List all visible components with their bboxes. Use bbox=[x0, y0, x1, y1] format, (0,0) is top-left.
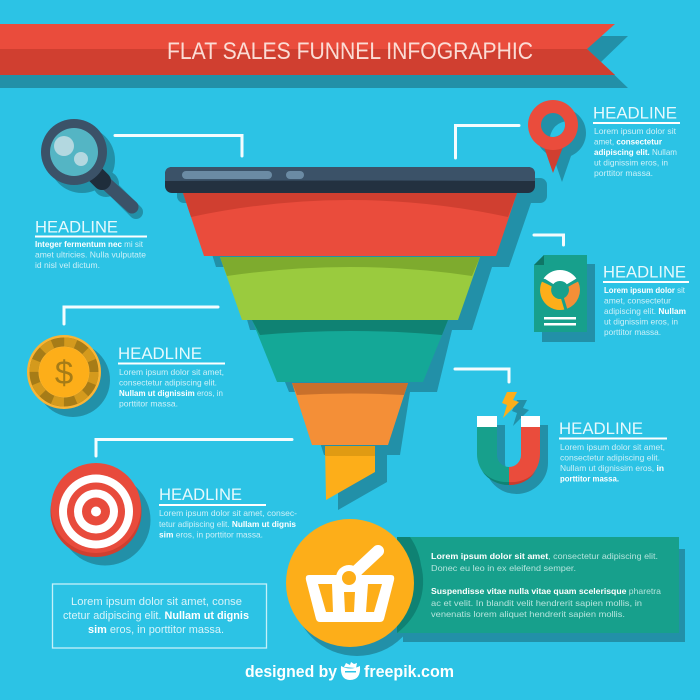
callout box: ctetur adipiscing elit. Nullam ut dignis bbox=[63, 610, 249, 622]
text block: coin headline: HEADLINE bbox=[118, 344, 202, 363]
text block: coin headline: Lorem ipsum dolor sit amet, bbox=[119, 367, 224, 377]
funnel layer: teal bbox=[252, 320, 448, 382]
callout box: Lorem ipsum dolor sit amet, conse bbox=[71, 596, 242, 608]
text block: panel copy: ac et velit. In blandit velit hendrerit sapien mollis, in bbox=[431, 598, 642, 608]
footer credit: designed by bbox=[245, 663, 338, 681]
icon: map pin bbox=[528, 100, 586, 182]
text block: magnet headline: HEADLINE bbox=[559, 419, 643, 438]
text block: coin headline bbox=[118, 344, 225, 408]
text block: pin headline: adipiscing elit. Nullam bbox=[594, 147, 677, 157]
text block: document headline: porttitor massa. bbox=[604, 327, 661, 337]
funnel layer: yellow spout bbox=[325, 446, 375, 500]
text block: target headline: sim eros, in porttitor massa. bbox=[159, 530, 263, 540]
funnel shadow bbox=[177, 178, 547, 510]
text block: panel copy bbox=[431, 551, 661, 619]
text block: document headline: Lorem ipsum dolor sit bbox=[604, 285, 686, 295]
text block: target headline: HEADLINE bbox=[159, 485, 242, 504]
funnel layer: orange bbox=[292, 383, 408, 445]
text block: magnet headline: porttitor massa. bbox=[560, 474, 619, 484]
text block: document headline: HEADLINE bbox=[603, 262, 686, 282]
text block: coin headline: Nullam ut dignissim eros, in bbox=[119, 388, 223, 398]
text block: magnifier headline: Integer fermentum nec mi sit bbox=[35, 239, 144, 249]
text block: pin headline: porttitor massa. bbox=[594, 168, 653, 178]
title ribbon bbox=[0, 24, 628, 88]
connector lines bbox=[64, 126, 564, 456]
text block: magnet headline: consectetur adipiscing elit. bbox=[560, 452, 660, 462]
text block: panel copy: Donec eu leo in ex eleifend semper. bbox=[431, 563, 576, 573]
icon: shopping basket bbox=[286, 519, 414, 647]
funnel layer: green bbox=[220, 257, 480, 320]
icon: target bbox=[50, 463, 150, 566]
title: FLAT SALES FUNNEL INFOGRAPHIC bbox=[167, 38, 533, 65]
text block: target headline bbox=[159, 485, 297, 540]
text block: target headline: Lorem ipsum dolor sit amet, consec- bbox=[159, 508, 297, 518]
text block: panel copy: venenatis lorem aliquet hendrerit sapien mollis. bbox=[431, 609, 625, 619]
text block: target headline: tetur adipiscing elit. Nullam ut dignis bbox=[159, 519, 296, 529]
icon: freepik logo bbox=[341, 662, 360, 680]
text block: magnifier headline: id nisl vel dictum. bbox=[35, 260, 100, 270]
text block: coin headline: porttitor massa. bbox=[119, 398, 178, 408]
text block: magnifier headline bbox=[35, 218, 147, 270]
icon: magnet bbox=[477, 392, 548, 494]
icon: magnifying glass bbox=[41, 119, 136, 212]
text block: panel copy: Suspendisse vitae nulla vitae quam scelerisque pharetra bbox=[431, 586, 661, 596]
footer credit bbox=[245, 662, 454, 681]
funnel layer: red bbox=[183, 193, 517, 256]
footer credit: freepik.com bbox=[364, 663, 454, 681]
text block: panel copy: Lorem ipsum dolor sit amet , consectetur adipiscing elit. bbox=[431, 551, 658, 561]
text block: magnifier headline: HEADLINE bbox=[35, 218, 118, 236]
callout box bbox=[52, 584, 266, 648]
text block: pin headline: ut dignissim eros, in bbox=[594, 158, 668, 168]
funnel bbox=[165, 167, 535, 500]
text block: document headline: amet, consectetur bbox=[604, 296, 671, 306]
icon: gold coin bbox=[27, 335, 110, 417]
text block: magnifier headline: amet ultricies. Nulla vulputate bbox=[35, 250, 146, 260]
text block: pin headline: HEADLINE bbox=[593, 104, 677, 122]
text block: document headline bbox=[603, 262, 689, 337]
text block: coin headline: consectetur adipiscing elit. bbox=[119, 378, 217, 388]
text block: magnet headline: Lorem ipsum dolor sit amet, bbox=[560, 442, 665, 452]
icon: gold coin: $ bbox=[55, 354, 73, 391]
callout box: sim eros, in porttitor massa. bbox=[88, 624, 224, 636]
text block: magnet headline bbox=[559, 419, 667, 484]
text block: document headline: ut dignissim eros, in bbox=[604, 316, 678, 326]
panel: basket summary bbox=[293, 528, 685, 656]
text block: pin headline: Lorem ipsum dolor sit bbox=[594, 126, 677, 136]
text block: pin headline: amet, consectetur bbox=[594, 136, 663, 146]
funnel rim bbox=[165, 167, 535, 193]
text block: magnet headline: Nullam ut dignissim eros, in bbox=[560, 463, 664, 473]
text block: document headline: adipiscing elit. Nullam bbox=[604, 306, 686, 316]
text block: pin headline bbox=[593, 104, 680, 178]
icon: report document bbox=[534, 255, 595, 342]
